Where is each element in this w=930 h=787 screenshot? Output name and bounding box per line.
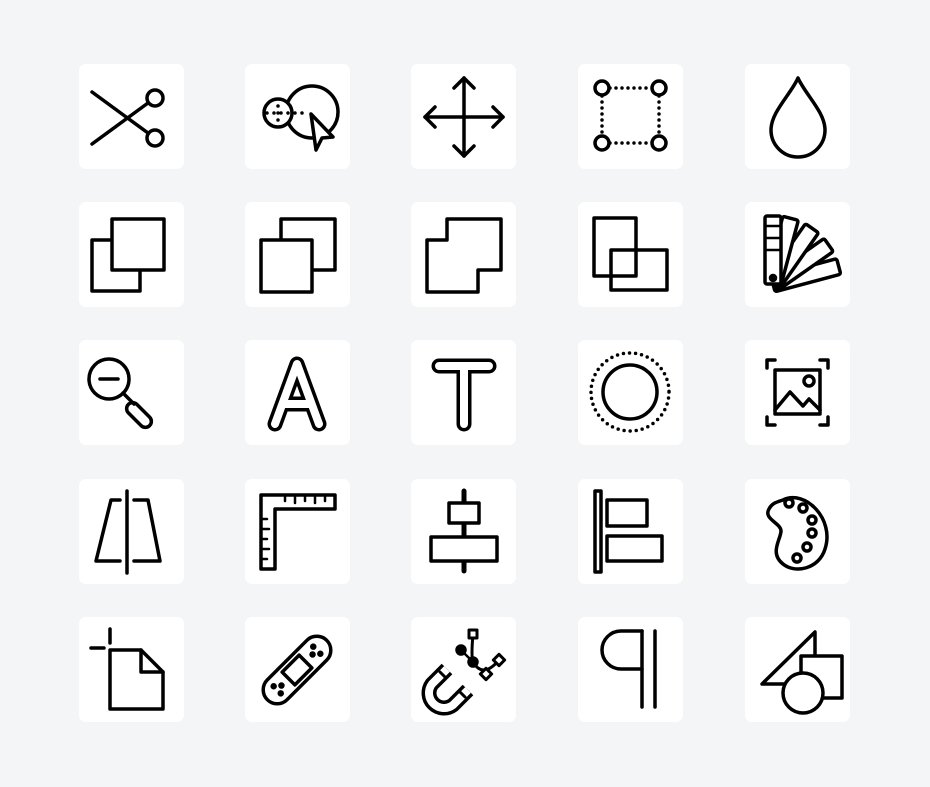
- tile: scissors: [79, 64, 184, 169]
- tile: align center: [411, 479, 516, 584]
- tile: paint palette: [745, 479, 850, 584]
- tile: zoom out: [79, 340, 184, 445]
- tile: dotted circle: [578, 340, 683, 445]
- tile: magnet with bezier: [411, 617, 516, 722]
- tile: align left: [578, 479, 683, 584]
- tile: move arrows: [411, 64, 516, 169]
- tile: selection box: [578, 64, 683, 169]
- tile: bring forward squares: [79, 202, 184, 307]
- tile: send backward squares: [245, 202, 350, 307]
- tile: new file crop: [79, 617, 184, 722]
- tile: union shape: [411, 202, 516, 307]
- tile: pilcrow: [578, 617, 683, 722]
- tile: overlapping rectangles: [578, 202, 683, 307]
- tile: flip: [79, 479, 184, 584]
- tile: bandage: [245, 617, 350, 722]
- tile: ruler: [245, 479, 350, 584]
- tile: selection circles with cursor: [245, 64, 350, 169]
- tile: water drop: [745, 64, 850, 169]
- tile: letter A: [245, 340, 350, 445]
- tile: image frame: [745, 340, 850, 445]
- tile: color swatches: [745, 202, 850, 307]
- tile: letter T: [411, 340, 516, 445]
- tile: shapes: [745, 617, 850, 722]
